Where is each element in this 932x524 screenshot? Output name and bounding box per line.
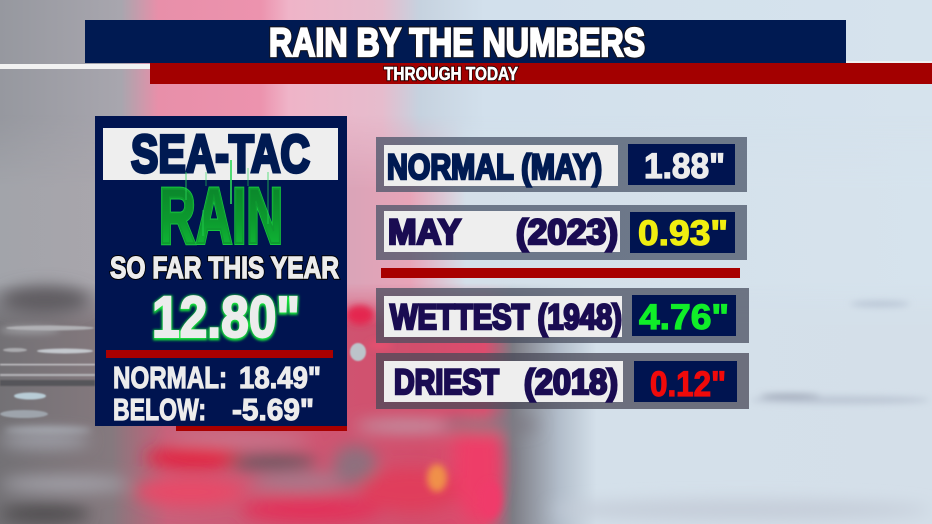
below normal: -5.69" [232, 392, 314, 427]
normal year-to-date: 18.49" [239, 360, 321, 395]
divider [381, 268, 740, 278]
row: wettest 1948: 4.76" [639, 298, 729, 337]
icon: dripping RAIN wordmark [159, 160, 283, 260]
row: May 2023 [376, 205, 747, 260]
So far this year label: SO FAR THIS YEAR [110, 250, 339, 285]
title: RAIN BY THE NUMBERS [269, 21, 645, 65]
water ripples [0, 326, 366, 418]
row: wettest 1948: WETTEST (1948) [390, 298, 622, 337]
So far this year label: SO FAR THIS YEAR [110, 250, 339, 285]
panel: Sea-Tac rain so far this year [95, 116, 347, 431]
row: May 2023: (2023) [516, 213, 618, 252]
subtitle banner [150, 63, 932, 84]
subtitle: THROUGH TODAY [384, 64, 518, 84]
total rainfall value: 12.80" [152, 286, 300, 351]
icon: dripping RAIN wordmark: RAIN [159, 171, 283, 260]
row: May 2023: 0.93" [638, 214, 728, 253]
below normal [113, 392, 314, 427]
title banner [85, 20, 846, 63]
panel background [95, 116, 347, 426]
header [0, 20, 932, 84]
red underline bar [176, 425, 347, 431]
divider [106, 350, 333, 358]
subtitle: THROUGH TODAY [384, 64, 518, 84]
row: normal May [376, 137, 747, 192]
total rainfall value: 12.80" [152, 285, 300, 350]
row: normal May: 1.88" [644, 147, 725, 186]
title: RAIN BY THE NUMBERS [269, 21, 645, 65]
Sea-Tac label [103, 128, 338, 180]
row: normal May: NORMAL (MAY) [387, 148, 602, 187]
icon: dripping RAIN wordmark: RAIN [159, 171, 283, 260]
row: driest 2018: (2018) [524, 363, 618, 402]
row: driest 2018: DRIEST [394, 363, 499, 402]
row: driest 2018 [376, 353, 749, 409]
panel: Sea-Tac rain so far this year: SEA-TAC [131, 125, 310, 184]
normal year-to-date: NORMAL: [113, 360, 227, 395]
white accent line right [846, 61, 932, 63]
below normal: BELOW: [113, 392, 206, 427]
row: May 2023: MAY [388, 213, 461, 252]
white accent line left [0, 64, 150, 69]
row: driest 2018: 0.12" [650, 365, 726, 404]
row: wettest 1948 [376, 288, 749, 343]
